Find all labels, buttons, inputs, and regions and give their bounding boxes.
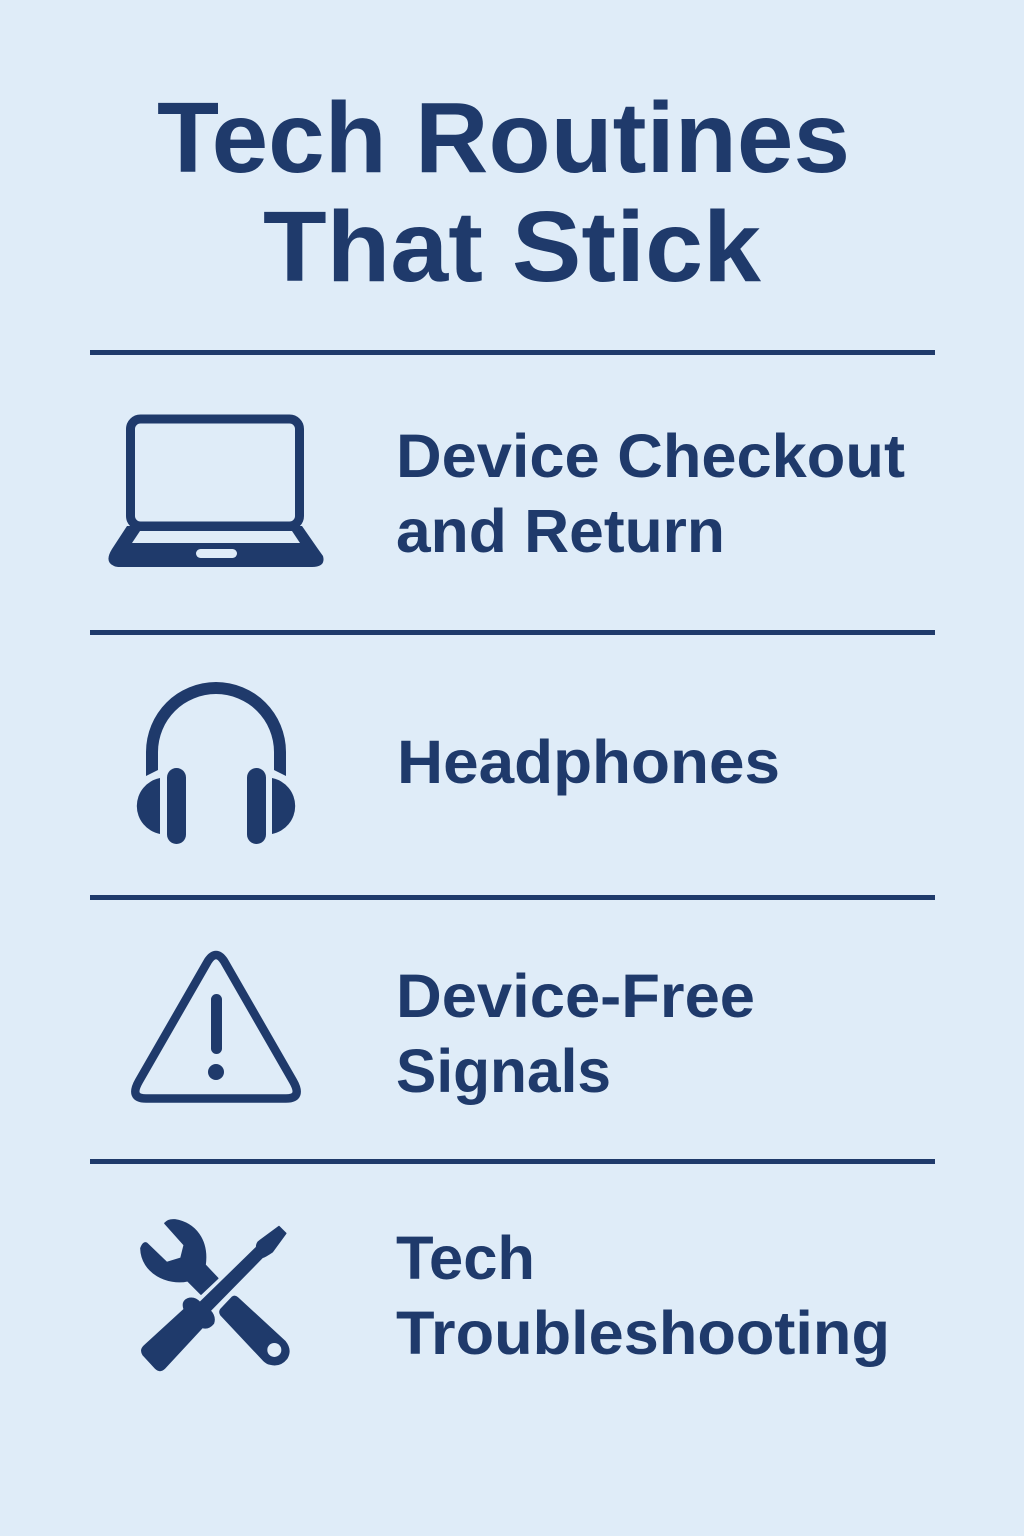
icon: headphones xyxy=(137,682,295,844)
label: device checkout and return xyxy=(396,422,905,565)
icon: warning triangle xyxy=(135,955,297,1098)
label: headphones: Headphones xyxy=(397,728,780,796)
title: Tech Routines xyxy=(157,82,850,194)
title: That Stick xyxy=(263,191,761,303)
label: device-free signals: Device-Free xyxy=(396,962,755,1030)
label: device-free signals xyxy=(396,962,755,1105)
panel: device-free signals xyxy=(135,955,755,1105)
title xyxy=(157,82,850,303)
label: device-free signals: Signals xyxy=(396,1037,611,1105)
icon: wrench and screwdriver xyxy=(141,1220,289,1370)
label: tech troubleshooting xyxy=(396,1224,890,1367)
panel: device checkout and return xyxy=(108,419,905,567)
label: device checkout and return: and Return xyxy=(396,497,725,565)
icon: laptop xyxy=(108,419,324,567)
label: tech troubleshooting: Tech xyxy=(396,1224,535,1292)
label: device checkout and return: Device Checkout xyxy=(396,422,905,490)
label: tech troubleshooting: Troubleshooting xyxy=(396,1299,890,1367)
panel: headphones xyxy=(137,682,780,844)
panel: tech troubleshooting xyxy=(141,1220,890,1370)
